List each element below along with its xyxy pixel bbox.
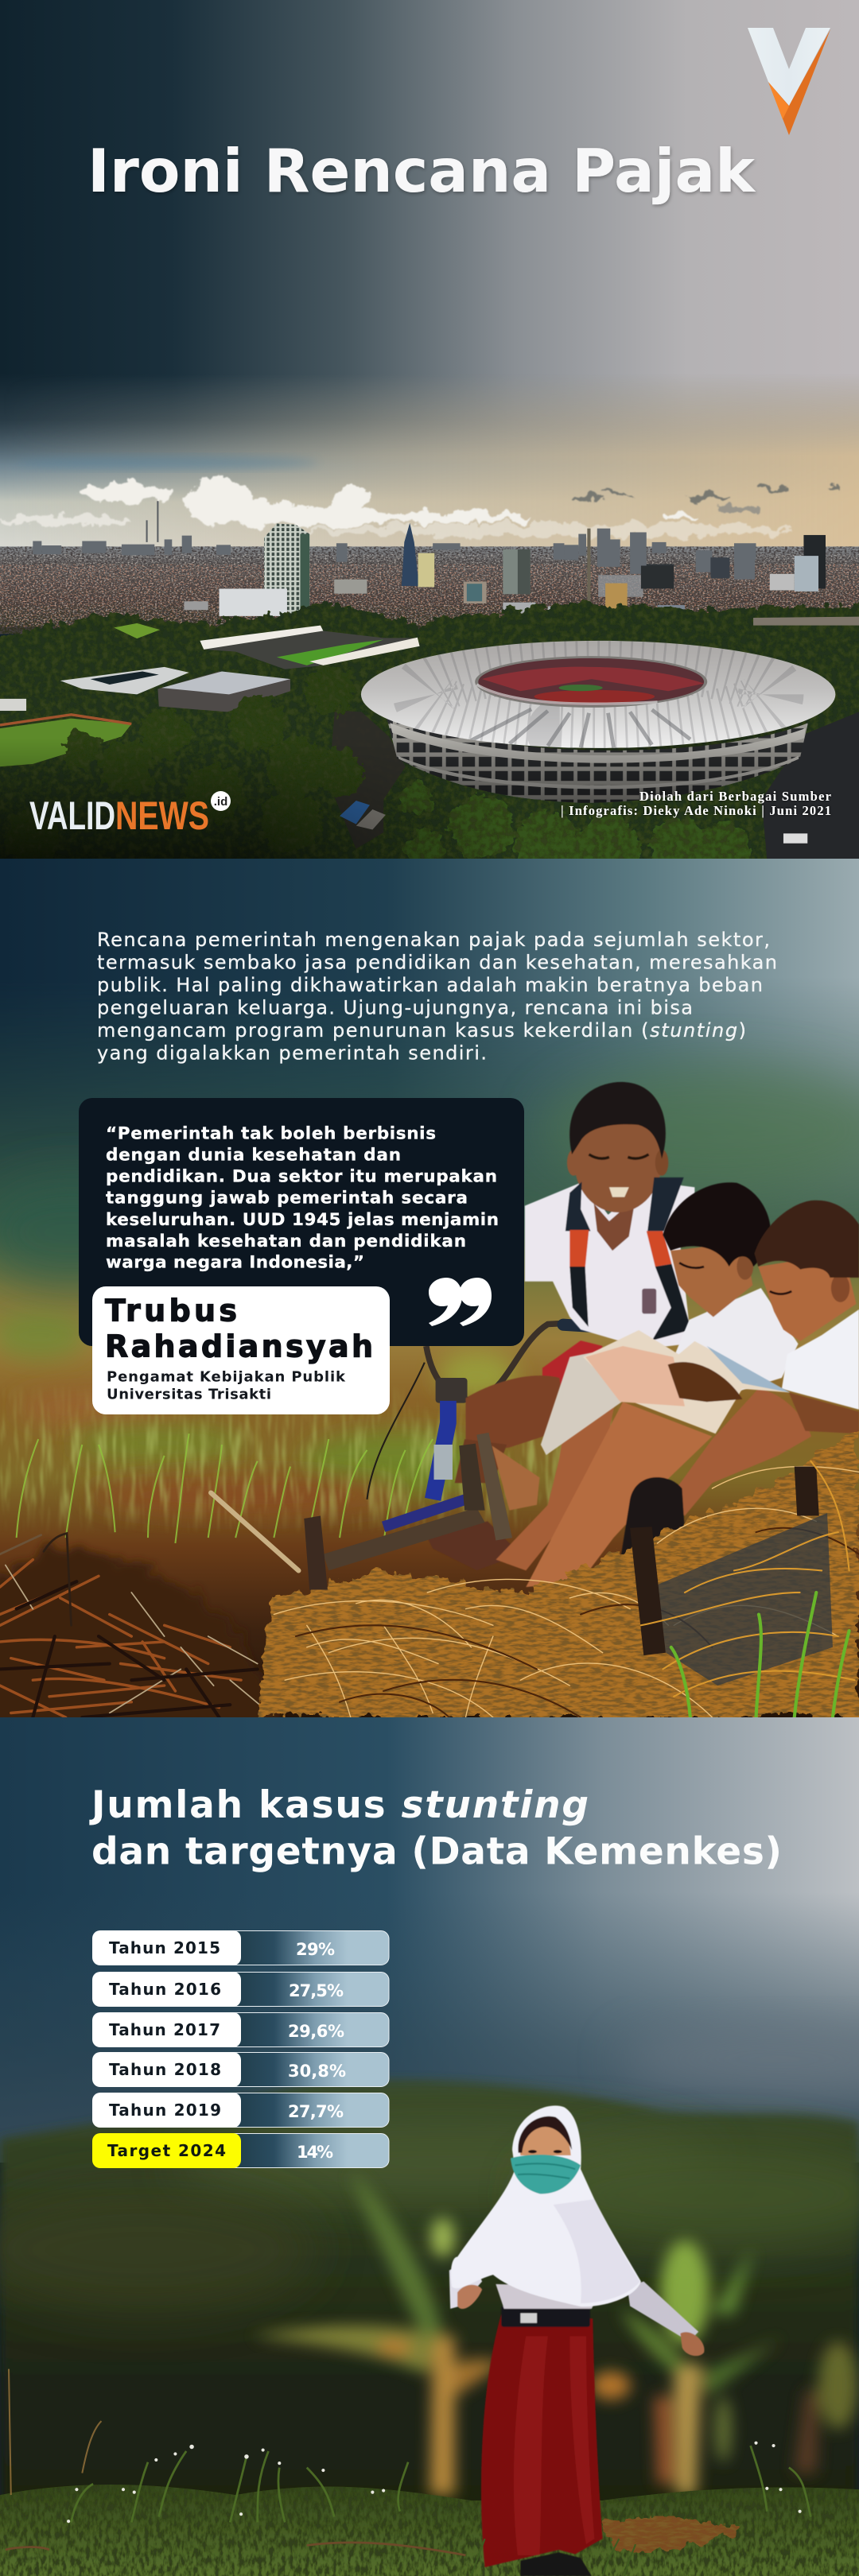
- row 2016: [92, 1972, 389, 2007]
- open book: [541, 1330, 790, 1455]
- row 2018: 30,8%: [288, 2062, 346, 2081]
- background: sky photo: [0, 0, 859, 572]
- data table: stunting by year: [92, 1930, 389, 2168]
- city: [0, 501, 859, 634]
- meadow: [0, 2369, 859, 2576]
- credit text: [561, 789, 831, 818]
- left stubble pile: [0, 1493, 298, 1746]
- quote text: [106, 1124, 499, 1272]
- row 2018: [92, 2052, 389, 2087]
- icon: closing quotation mark: [429, 1278, 492, 1326]
- intro paragraph: pengeluaran keluarga. Ujung-ujungnya, rencana ini bisa: [97, 997, 693, 1019]
- speaker role: Pengamat Kebijakan Publik: [107, 1369, 346, 1386]
- row 2018: Tahun 2018: [109, 2060, 221, 2079]
- row 2019: [92, 2093, 389, 2128]
- intro paragraph: mengancam program penurunan kasus kekerdilan (stunting): [97, 1019, 746, 1042]
- quote text: keseluruhan. UUD 1945 jelas menjamin: [106, 1210, 499, 1230]
- row 2016: Tahun 2016: [109, 1980, 221, 1999]
- quote text: masalah kesehatan dan pendidikan: [106, 1232, 466, 1251]
- name card: [92, 1286, 390, 1414]
- intro paragraph: [97, 929, 777, 1064]
- foreground canopy: [56, 665, 752, 859]
- row 2017: Tahun 2017: [109, 2020, 220, 2039]
- logo: VALIDNEWS.id: [29, 791, 231, 838]
- parkland trees: [0, 603, 859, 887]
- row target 2024: Target 2024: [107, 2141, 226, 2160]
- grass blades: [17, 1433, 433, 1543]
- row 2015: [92, 1930, 389, 1965]
- buildings: [184, 523, 826, 616]
- speaker role: [107, 1369, 346, 1402]
- background: stormy sky and forest: [0, 1717, 859, 2576]
- row 2017: [92, 2012, 389, 2047]
- quote text: dengan dunia kesehatan dan: [106, 1145, 401, 1165]
- row 2015: Tahun 2015: [109, 1938, 220, 1957]
- scene: banana trees, grass and flowers: [0, 2105, 859, 2576]
- grass in front of skirt: [471, 2539, 636, 2576]
- title: Ironi Rencana Pajak: [87, 136, 756, 206]
- intro paragraph: termasuk sembako jasa pendidikan dan kesehatan, meresahkan: [97, 951, 777, 973]
- stadium GBK: [361, 641, 835, 803]
- row 2017: 29,6%: [288, 2022, 344, 2041]
- credit text: Diolah dari Berbagai Sumber: [639, 789, 831, 804]
- cart and hay: [258, 1428, 859, 1717]
- logo: VALIDNEWS.id: VALID: [29, 793, 115, 838]
- logo: VALIDNEWS.id: NEWS: [115, 793, 209, 838]
- chart heading: dan targetnya (Data Kemenkes): [91, 1830, 782, 1873]
- row 2016: 27,5%: [289, 1981, 344, 2000]
- quote text: tanggung jawab pemerintah secara: [106, 1189, 468, 1208]
- quote text: warga negara Indonesia,”: [106, 1252, 364, 1272]
- boy 1: [525, 1082, 694, 1348]
- row 2019: 27,7%: [288, 2102, 344, 2121]
- panel: hero with stadium photo: [0, 0, 859, 887]
- speaker role: Universitas Trisakti: [107, 1386, 271, 1402]
- quote panel: [79, 1098, 524, 1346]
- speaker name: Trubus: [105, 1294, 237, 1329]
- boy 3: [754, 1201, 859, 1410]
- scene: hay, bicycle and three boys: [0, 1082, 859, 1746]
- boy 2: [663, 1182, 799, 1393]
- chart heading: [89, 1783, 782, 1873]
- panel: text, quote and schoolboys photo: [0, 859, 859, 1746]
- icon: Validnews V logo: [748, 28, 830, 135]
- chart heading: Jumlah kasus stunting: [89, 1783, 589, 1827]
- row 2015: 29%: [296, 1940, 335, 1959]
- intro paragraph: yang digalakkan pemerintah sendiri.: [97, 1042, 487, 1064]
- quote text: “Pemerintah tak boleh berbisnis: [106, 1124, 436, 1144]
- speaker name: [105, 1294, 373, 1364]
- background: misty field photo: [0, 859, 859, 1717]
- bicycle: [367, 1323, 624, 1527]
- boy 1 knee and shorts: [427, 1340, 603, 1570]
- stadium madya and fields: [0, 626, 420, 766]
- legs: [496, 1389, 859, 1587]
- logo: VALIDNEWS.id: .id: [214, 795, 227, 809]
- banana trees: [252, 2172, 858, 2495]
- girl in school uniform: [449, 2105, 704, 2576]
- intro paragraph: publik. Hal paling dikhawatirkan adalah makin beratnya beban: [97, 974, 763, 996]
- row target 2024: [92, 2133, 389, 2168]
- credit text: | Infografis: Dieky Ade Ninoki | Juni 2021: [561, 803, 831, 818]
- quote text: pendidikan. Dua sektor itu merupakan: [106, 1167, 497, 1187]
- stadium photo scene: [0, 501, 859, 887]
- row 2019: Tahun 2019: [109, 2101, 221, 2120]
- intro paragraph: Rencana pemerintah mengenakan pajak pada sejumlah sektor,: [97, 929, 770, 951]
- panel: stunting data and girl photo: [0, 1717, 859, 2576]
- speaker name: Rahadiansyah: [105, 1329, 373, 1364]
- row target 2024: 14%: [297, 2143, 333, 2162]
